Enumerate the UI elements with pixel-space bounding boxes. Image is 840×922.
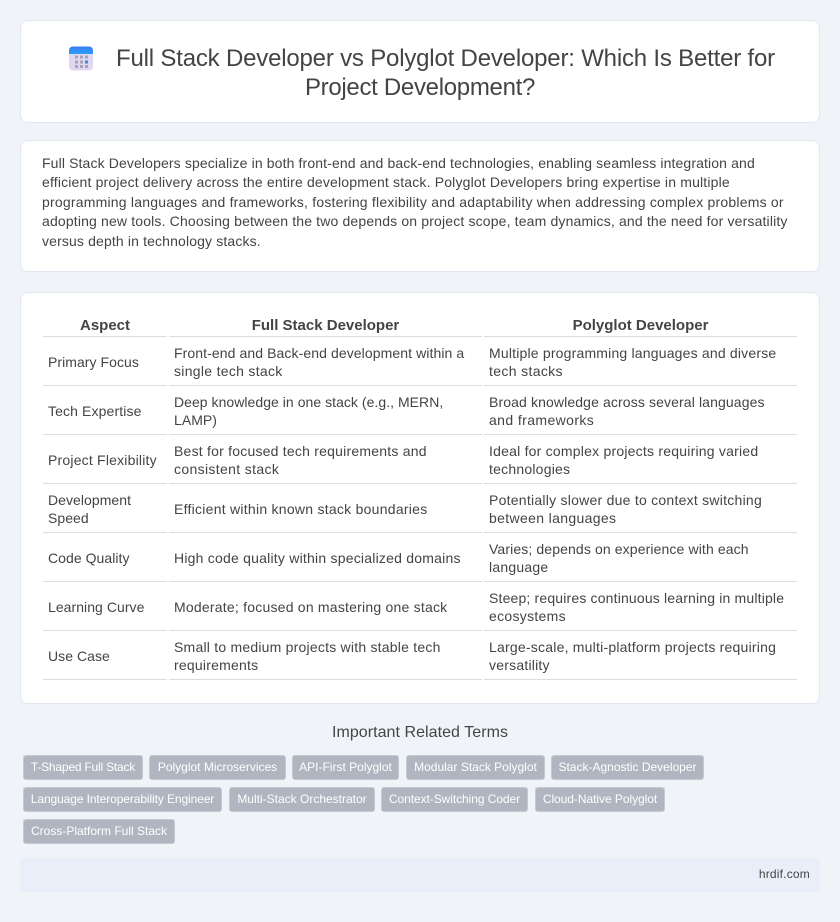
text block: introduction paragraph: programming languages and frameworks, fostering flexibility and adaptability when addressing complex problems or — [42, 194, 784, 210]
text block: introduction paragraph: adopting new tools. Choosing between the two depends on project scope, team dynamics, and the need for versatility — [42, 213, 788, 229]
table: comparison: Varies; depends on experience with each — [489, 541, 749, 557]
tag list: related terms — [23, 755, 704, 844]
table: comparison: High code quality within specialized domains — [174, 550, 461, 566]
table: comparison: consistent stack — [174, 461, 279, 477]
table: comparison: Efficient within known stack boundaries — [174, 501, 427, 517]
table: comparison: Development — [48, 492, 131, 508]
table: comparison: Best for focused tech requirements and — [174, 443, 427, 459]
table: comparison: tech stacks — [489, 363, 563, 379]
icon: calendar — [69, 46, 93, 70]
table: comparison: Broad knowledge across several languages — [489, 394, 765, 410]
table: comparison: Primary Focus — [48, 354, 139, 370]
column header: polyglot developer: Polyglot Developer — [573, 317, 708, 334]
tag list: related terms: Language Interoperability Engineer — [31, 792, 214, 806]
table: comparison: ecosystems — [489, 608, 566, 624]
table: comparison: Small to medium projects with stable tech — [174, 639, 441, 655]
table: comparison: Deep knowledge in one stack (e.g., MERN, — [174, 394, 443, 410]
table: comparison — [43, 317, 797, 680]
table: comparison: Multiple programming languages and diverse — [489, 345, 776, 361]
table: comparison: Moderate; focused on mastering one stack — [174, 599, 447, 615]
tag list: related terms: Cloud-Native Polyglot — [543, 792, 657, 806]
table: comparison: Use Case — [48, 648, 110, 664]
column header: aspect: Aspect — [80, 317, 130, 334]
heading: page title: Full Stack Developer vs Polyglot Developer: Which Is Better for — [116, 45, 775, 72]
heading: page title: Project Development? — [305, 74, 535, 101]
table: comparison: between languages — [489, 510, 616, 526]
table: comparison: Tech Expertise — [48, 403, 142, 419]
tag list: related terms: Cross-Platform Full Stack — [31, 824, 167, 838]
text block: introduction paragraph — [42, 155, 788, 249]
column header: full stack developer: Full Stack Developer — [252, 317, 399, 334]
text block: introduction paragraph: Full Stack Developers specialize in both front-end and back-end technologies, enabling seamless integration and — [42, 155, 755, 171]
table: comparison: Potentially slower due to context switching — [489, 492, 762, 508]
tag list: related terms: T-Shaped Full Stack — [31, 760, 135, 774]
table: comparison: language — [489, 559, 548, 575]
tag list: related terms: Context-Switching Coder — [389, 792, 520, 806]
table: comparison: and frameworks — [489, 412, 594, 428]
table: comparison: technologies — [489, 461, 570, 477]
table: comparison: Steep; requires continuous learning in multiple — [489, 590, 784, 606]
panel: comparison table — [20, 292, 820, 704]
table: comparison: Learning Curve — [48, 599, 144, 615]
panel: introduction — [20, 140, 820, 272]
tag list: related terms: Modular Stack Polyglot — [414, 760, 537, 774]
table: comparison: LAMP) — [174, 412, 217, 428]
tag list: related terms: API-First Polyglot — [299, 760, 392, 774]
table: comparison: versatility — [489, 657, 550, 673]
table: comparison: requirements — [174, 657, 258, 673]
table: comparison: Project Flexibility — [48, 452, 157, 468]
text block: introduction paragraph: efficient project delivery across the entire development stack. Polyglot Developers bring expertise in multiple — [42, 174, 730, 190]
footer bar — [20, 858, 820, 892]
heading: important related terms: Important Related Terms — [332, 724, 508, 741]
table: comparison: Front-end and Back-end development within a — [174, 345, 464, 361]
tag list: related terms: Polyglot Microservices — [158, 760, 277, 774]
panel: title header — [20, 20, 820, 123]
tag list: related terms: Multi-Stack Orchestrator — [237, 792, 367, 806]
table: comparison: Code Quality — [48, 550, 130, 566]
heading: page title — [116, 45, 775, 101]
tag list: related terms: Stack-Agnostic Developer — [558, 760, 697, 774]
table: comparison: Ideal for complex projects requiring varied — [489, 443, 758, 459]
table: comparison: Large-scale, multi-platform projects requiring — [489, 639, 776, 655]
footer source: hrdif.com — [759, 867, 810, 881]
table: comparison: single tech stack — [174, 363, 283, 379]
table: comparison: Speed — [48, 510, 89, 526]
text block: introduction paragraph: versus depth in technology stacks. — [42, 233, 261, 249]
